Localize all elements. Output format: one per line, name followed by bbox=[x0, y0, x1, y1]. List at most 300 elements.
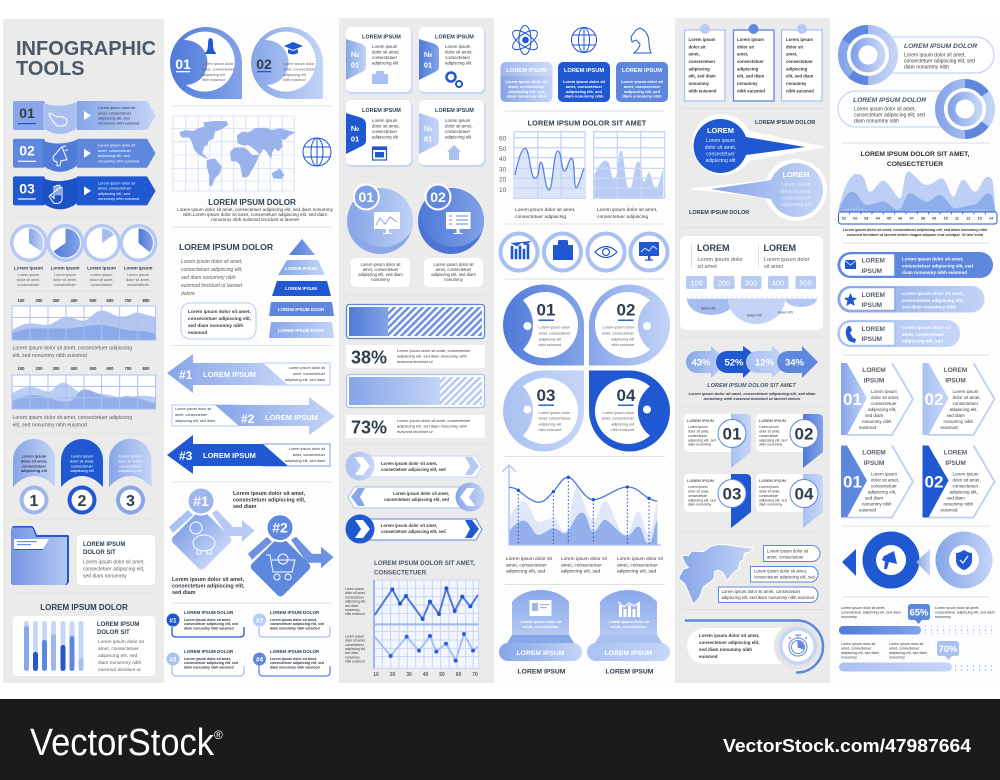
chevron card C: adipiscing elit, bbox=[868, 490, 896, 494]
area chart 1: 200 bbox=[36, 298, 43, 303]
note cards: nibh euismod bbox=[688, 88, 717, 94]
icon: monitor chart bbox=[639, 242, 659, 261]
step arrow 02: amet, consectetuer bbox=[98, 148, 132, 153]
diamond text 1: consectetuer adipiscing elit, bbox=[233, 498, 306, 504]
bracket text: consectetuer adipiscing elit, sed bbox=[184, 622, 238, 626]
note cards: consectetuer bbox=[688, 59, 716, 64]
number card: gears: LOREM IPSUM bbox=[435, 34, 474, 40]
vertical bar chart card: euismod tincidunt ut bbox=[98, 667, 141, 673]
note cards: Lorem ipsum bbox=[786, 37, 813, 42]
icon: gears bbox=[446, 72, 462, 87]
number card: briefcase: dolor sit amet, bbox=[372, 50, 400, 54]
chevron card A: dolor sit amet, bbox=[871, 395, 899, 400]
eurasia africa map bbox=[678, 544, 753, 604]
dial 02: 02 bbox=[617, 300, 635, 320]
step arrow 01: 01 bbox=[19, 105, 35, 121]
speech bubble light: dolor sit amet, bbox=[780, 189, 812, 195]
bubble 2 heading: LOREM IPSUM DOLOR bbox=[689, 210, 749, 216]
chevron card C: LOREM bbox=[862, 450, 886, 456]
note cards: amet, bbox=[688, 52, 700, 57]
target pill 1: Lorem ipsum dolor sit amet, bbox=[904, 52, 966, 58]
diamond step #2 bbox=[248, 514, 334, 598]
area chart 2: 400 bbox=[70, 366, 78, 371]
outlined text box bbox=[181, 303, 256, 339]
bookmark card 02: adipiscing elit, sed bbox=[759, 438, 787, 442]
note cards: adipiscing bbox=[688, 66, 710, 71]
number card: briefcase: 01 bbox=[351, 60, 359, 70]
scale card: 500 bbox=[799, 278, 812, 288]
stopwatch timer block: Lorem ipsum dolor sit amet, bbox=[699, 633, 759, 638]
arrow #2: LOREM IPSUM bbox=[265, 413, 318, 422]
chevron card A bbox=[841, 363, 913, 435]
chevron card B: euismod bbox=[940, 425, 958, 430]
area chart 2: 300 bbox=[52, 366, 60, 371]
dial 01: nibh euismod bbox=[538, 343, 561, 347]
panel: column 5 bbox=[675, 18, 830, 683]
circle text cards bbox=[351, 258, 483, 287]
chart captions: Lorem ipsum dolor sit amet, bbox=[597, 207, 657, 213]
info card 2: Lorem ipsum dolor sit bbox=[563, 79, 606, 84]
number card: gears: Lorem ipsum bbox=[445, 44, 471, 49]
step arrow 03: nonummy nibh euismod bbox=[98, 196, 139, 201]
numbered arches: 3 bbox=[126, 493, 135, 510]
contact pill: phone: adipiscing elit, sed bbox=[902, 338, 943, 344]
map label boxes: Lorem ipsum dolor sit bbox=[767, 548, 809, 554]
info card 2 bbox=[558, 62, 610, 102]
info card 2: diam nonummy nibh bbox=[564, 94, 604, 98]
chevron card B: LOREM bbox=[944, 367, 967, 374]
map text: Lorem ipsum dolor sit amet, consectetuer adipiscing elit, sed diam nonummy bbox=[177, 207, 334, 212]
image id: VectorStock.com/47987664 bbox=[723, 736, 971, 756]
progress 70: 70% bbox=[938, 644, 958, 655]
bookmark card 02 bbox=[756, 414, 823, 468]
bracket badges bbox=[166, 614, 266, 666]
line chart side text: dolor sit amet, bbox=[345, 591, 366, 595]
stat card 73%: 73% bbox=[351, 418, 387, 438]
numbered arches: consectetuer bbox=[71, 464, 94, 468]
outlined text box: Lorem ipsum dolor sit amet, bbox=[188, 309, 251, 314]
wave chart number strip: 14 bbox=[989, 216, 994, 220]
footer watermark band bbox=[0, 699, 1000, 780]
area chart 1: 800 bbox=[142, 298, 150, 303]
icon: shopping cart bbox=[266, 554, 295, 580]
line chart side text: nonummy bbox=[345, 608, 360, 612]
area chart 2: 700 bbox=[124, 366, 132, 371]
donut with shield bbox=[916, 532, 992, 588]
arrow #1: adipiscing elit, sed diam bbox=[285, 378, 325, 382]
folder text card: consectetuer adipiscing elit, bbox=[83, 566, 144, 572]
note cards: dolor sit bbox=[786, 44, 804, 49]
percent text: Lorem ipsum dolor sit amet, consectetuer adipiscing elit, sed diam bbox=[689, 391, 816, 396]
chevron card B: sed diam bbox=[946, 413, 965, 418]
wave chart number strip: 04 bbox=[876, 216, 881, 220]
arrow #3 bbox=[167, 435, 330, 474]
step arrow 02: adipiscing elit, sed bbox=[98, 153, 130, 158]
dial 03: adipiscing elit bbox=[538, 422, 562, 426]
pie charts row: Lorem ipsum bbox=[14, 266, 43, 270]
wave chart number strip bbox=[838, 212, 997, 224]
dial 03: 03 bbox=[537, 386, 555, 405]
dial 03: amet, consectetuer bbox=[538, 416, 572, 420]
icon: briefcase bbox=[372, 71, 388, 84]
dial 01: Lorem ipsum dolor bbox=[538, 326, 571, 330]
numbered arches: consectetuer bbox=[119, 464, 142, 468]
teardrop 02 bbox=[251, 27, 323, 99]
bracket badges: #3 bbox=[169, 656, 177, 664]
stopwatch timer block: consectetuer adipiscing elit, bbox=[699, 640, 760, 645]
step arrow 02: 02 bbox=[19, 143, 35, 159]
pie charts row: Lorem ipsum bbox=[127, 273, 149, 277]
chart 1 caption: Lorem ipsum dolor sit amet, consectetuer adipiscing bbox=[12, 346, 132, 352]
chevron card A: sed diam bbox=[865, 413, 884, 418]
bell card 2 bbox=[587, 590, 670, 661]
arrow #3: amet, consectetuer bbox=[293, 453, 326, 457]
chevron card D: euismod bbox=[940, 508, 958, 512]
chart 2 caption: elit, sed nonummy nibh euismod bbox=[12, 422, 87, 428]
map label boxes: adipiscing elit, sed diam nonummy nibh euismod bbox=[722, 595, 815, 600]
bookmark card 03: Lorem ipsum bbox=[688, 485, 708, 489]
area line charts bbox=[514, 132, 665, 198]
step arrow 03: adipiscing elit, sed bbox=[98, 191, 130, 196]
progress 70: nonummy bbox=[841, 656, 857, 660]
contact pill: mail bbox=[838, 252, 993, 278]
chevron card C: euismod bbox=[859, 508, 877, 512]
chevron card B: consectetuer bbox=[952, 401, 979, 406]
chevron card D bbox=[922, 446, 994, 518]
chart 1 caption: elit, sed nonummy nibh euismod bbox=[12, 353, 87, 359]
percent arrows: 43% bbox=[691, 358, 711, 368]
numbered arches: Lorem ipsum bbox=[71, 454, 93, 458]
folder text card: sed diam nonummy bbox=[83, 574, 127, 580]
line chart axis labels: 60 bbox=[456, 672, 461, 678]
step arrow 03: Lorem ipsum dolor sit bbox=[98, 180, 136, 185]
bracket badges: #2 bbox=[256, 618, 263, 624]
number card: gears: 01 bbox=[424, 60, 432, 70]
diamond step #1 bbox=[169, 488, 254, 571]
icon rings bbox=[500, 234, 668, 270]
teardrop 01: 01 bbox=[175, 56, 191, 72]
chevron card C: dolor sit amet, bbox=[871, 478, 899, 482]
circle text cards: nonummy bbox=[444, 277, 464, 282]
step arrow 02 bbox=[13, 139, 156, 172]
info card 1: diam nonummy nibh bbox=[507, 94, 547, 98]
number card: house: adipiscing elit bbox=[445, 134, 472, 140]
wave chart number strip: 06 bbox=[898, 216, 902, 220]
progress 70: amet, consectetuer bbox=[841, 646, 872, 650]
contact pill: star: sed diam nonummy nibh bbox=[902, 304, 956, 310]
note cards: nonummy bbox=[786, 81, 807, 86]
bookmark card 01: Lorem ipsum bbox=[688, 425, 708, 429]
diamond text 1: Lorem ipsum dolor sit amet, bbox=[233, 491, 306, 497]
arrow #1: #1 bbox=[179, 368, 193, 382]
scale card: 300 bbox=[745, 278, 757, 288]
speech bubble dark: dolor sit amet, bbox=[705, 145, 736, 151]
chevron card D: consectetuer bbox=[952, 484, 979, 488]
vertical bar chart card: DOLOR SIT bbox=[97, 630, 130, 636]
teardrop 01: Lorem ipsum dolor bbox=[202, 62, 234, 66]
contact pill: star: Lorem ipsum dolor sit amet, bbox=[902, 291, 964, 296]
contact pill: phone: Lorem ipsum dolor sit bbox=[902, 325, 951, 330]
step arrow 01 bbox=[13, 101, 156, 134]
folder bbox=[11, 526, 69, 585]
number card: calendar: dolor sit amet, bbox=[372, 124, 400, 128]
step arrow 03 bbox=[13, 176, 156, 209]
scale card: lorem #2 bbox=[747, 314, 762, 318]
heading: LOREM IPSUM DOLOR bbox=[40, 603, 128, 612]
numbered arches: dolor sit amet, bbox=[70, 458, 94, 464]
contact pill: star bbox=[838, 286, 984, 312]
progress 65 bbox=[839, 604, 995, 634]
bell card 1 bbox=[499, 590, 582, 661]
note cards: Lorem ipsum bbox=[737, 37, 764, 42]
arrow #1 bbox=[167, 354, 330, 393]
dial 04: Lorem ipsum dolor bbox=[603, 411, 635, 415]
chevron card B: dolor sit amet, bbox=[952, 395, 981, 400]
bookmark card 03: LOREM IPSUM bbox=[687, 479, 715, 483]
diamond step #1: #1 bbox=[193, 493, 209, 509]
chevron card A: IPSUM bbox=[864, 378, 884, 384]
italic text: euismod tincidunt ut laoreet bbox=[181, 283, 243, 289]
number card: house bbox=[419, 100, 486, 167]
line chart side text: nibh euismod bbox=[345, 660, 365, 664]
numbered arches: Lorem ipsum bbox=[119, 454, 141, 458]
circle text cards: adipiscing elit, sed diam bbox=[431, 272, 476, 277]
icon: megaphone bbox=[53, 146, 68, 166]
pie charts row: consectetuer bbox=[127, 283, 150, 287]
speech bubble light: LOREM bbox=[782, 170, 810, 179]
bookmark card 01: dolor sit amet, bbox=[688, 430, 709, 434]
number card: briefcase: LOREM IPSUM bbox=[362, 34, 401, 40]
bookmark card 03: adipiscing elit, sed bbox=[688, 498, 716, 502]
icon: graduation cap bbox=[284, 42, 303, 54]
bell card 1: Lorem ipsum dolor sit bbox=[521, 619, 562, 624]
chevron card C: 01 bbox=[843, 472, 862, 492]
info card 2: LOREM IPSUM bbox=[564, 68, 604, 74]
progress 70: Lorem ipsum dolor sit bbox=[841, 642, 875, 646]
stat card 73%: euismod tincidunt ut bbox=[397, 429, 433, 434]
numbered arches: Lorem ipsum bbox=[22, 454, 47, 458]
bracket badges: #1 bbox=[169, 618, 177, 624]
note cards: elit, sed diam bbox=[786, 74, 813, 79]
dial 01: 01 bbox=[537, 300, 555, 320]
progress 70: Lorem ipsum dolor sit bbox=[889, 642, 923, 646]
scale card: Lorem ipsum dolor bbox=[764, 257, 810, 263]
y axis labels: 40 bbox=[499, 156, 507, 163]
bookmark card 03 bbox=[684, 474, 751, 528]
step arrow 01: amet, consectetuer bbox=[98, 110, 132, 115]
bell card 1: LOREM IPSUM bbox=[517, 650, 565, 657]
pie charts row: Lorem ipsum bbox=[124, 266, 152, 270]
circle 02 with checklist: 02 bbox=[430, 189, 446, 205]
contact pill: star: consectetuer adipiscing elit, bbox=[902, 298, 964, 303]
contact pill: star: IPSUM bbox=[862, 302, 882, 309]
wave chart number strip: 02 bbox=[853, 216, 857, 220]
line chart side text: consectetuer bbox=[345, 643, 365, 647]
contact pill: mail: diam nonummy nibh euismod bbox=[902, 270, 967, 275]
number card: house: Lorem ipsum bbox=[445, 118, 471, 123]
info card 1: amet, consectetuer bbox=[508, 84, 545, 89]
vertical bar chart card: Lorem ipsum dolor sit bbox=[98, 639, 145, 645]
bracket text: Lorem ipsum dolor sit amet, bbox=[270, 657, 317, 661]
icon: house bbox=[447, 145, 461, 160]
note cards: adipiscing bbox=[786, 66, 808, 71]
teardrop 01: adipiscing elit bbox=[202, 73, 226, 77]
note cards: elit, sed diam bbox=[688, 74, 716, 79]
chevron card A: LOREM bbox=[862, 367, 886, 374]
note cards: consectetuer bbox=[737, 59, 764, 64]
percent heading: LOREM IPSUM DOLOR SIT AMET bbox=[707, 383, 796, 389]
pie charts row: consectetuer bbox=[54, 283, 77, 287]
diamond step #2: #2 bbox=[272, 520, 288, 536]
chevron card D: nonummy nibh bbox=[944, 502, 974, 506]
number card: house: 01 bbox=[424, 134, 432, 144]
note cards: amet, bbox=[737, 52, 748, 57]
dial 01 bbox=[503, 284, 584, 366]
stopwatch timer block: euismod bbox=[699, 654, 718, 659]
target pill 1: consectetuer adipiscing elit, sed bbox=[904, 58, 975, 64]
outlined text box: euismod bbox=[188, 330, 207, 335]
bracket text: consectetuer adipiscing elit, sed bbox=[270, 622, 324, 626]
bookmark card 03: diam nonummy bbox=[688, 502, 711, 506]
chevron card B: adipiscing elit, bbox=[950, 407, 978, 412]
area chart captions: adipiscing elit, sed bbox=[561, 568, 601, 574]
vertical bar chart card bbox=[13, 616, 155, 676]
number card: house: dolor sit amet, bbox=[445, 124, 473, 128]
icon: piggy bank bbox=[190, 522, 215, 554]
contact pill: phone: IPSUM bbox=[862, 336, 882, 343]
italic text: Lorem ipsum dolor sit amet, bbox=[181, 259, 243, 265]
dial 02: Lorem ipsum dolor bbox=[603, 326, 635, 330]
teardrop 02: nibh euismod bbox=[283, 78, 306, 82]
teardrop 01: nibh euismod bbox=[202, 78, 225, 82]
chart 2 caption: Lorem ipsum dolor sit amet, consectetuer adipiscing bbox=[12, 415, 132, 421]
chevron card B: Lorem ipsum bbox=[952, 389, 979, 394]
bookmark card 04 bbox=[756, 474, 823, 528]
number card: house: consectetuer bbox=[445, 129, 471, 134]
progress 65: Lorem ipsum dolor sit amet, bbox=[841, 606, 885, 610]
chevron card D: 02 bbox=[924, 472, 943, 492]
arrow #2 bbox=[172, 397, 335, 435]
bracket text: diam nonummy nibh euismod bbox=[184, 666, 234, 670]
wave chart number strip: 05 bbox=[887, 216, 891, 220]
pyramid bbox=[269, 239, 334, 338]
icon: bar chart bbox=[511, 241, 531, 259]
area chart captions: amet, consectetuer bbox=[561, 562, 602, 568]
dial 01: adipiscing elit bbox=[538, 338, 562, 342]
circle text cards: Lorem ipsum dolor sit bbox=[360, 262, 401, 267]
info card 3: LOREM IPSUM bbox=[622, 68, 662, 74]
bell card 2 label: LOREM IPSUM bbox=[606, 668, 654, 676]
area chart 2: 600 bbox=[106, 366, 114, 371]
teardrop 02: Lorem ipsum dolor bbox=[283, 62, 315, 66]
wave chart caption: Lorem ipsum dolor sit amet, consectetuer adipiscing elit, sed diam nonummy nibh bbox=[843, 228, 988, 232]
line chart side text: sed diam bbox=[345, 604, 359, 608]
icon: chess knight bbox=[631, 28, 651, 53]
number card: calendar: consectetuer bbox=[372, 129, 398, 134]
arrow #2: Lorem ipsum dolor sit bbox=[175, 407, 212, 411]
title: INFOGRAPHIC bbox=[16, 38, 156, 60]
scale card: lorem #3 bbox=[778, 310, 793, 314]
speech bubble dark: Lorem ipsum bbox=[706, 138, 735, 144]
scale card: 100 bbox=[690, 278, 703, 288]
area chart 1: 700 bbox=[124, 298, 132, 303]
numbered arches: 2 bbox=[78, 493, 87, 510]
icon: id card bbox=[530, 600, 552, 616]
number card: house: № bbox=[424, 124, 432, 133]
wave chart number strip: 11 bbox=[955, 216, 959, 220]
icon: bell bbox=[205, 38, 216, 54]
chevron card B: nonummy nibh bbox=[944, 419, 974, 424]
pie charts row: dolor sit amet, bbox=[17, 278, 40, 282]
map text: nonummy nibh euismod tincidunt ut laoreet bbox=[211, 217, 300, 222]
chevron card A: adipiscing elit, bbox=[868, 407, 896, 412]
title: TOOLS bbox=[16, 58, 85, 80]
pie charts row: dolor sit amet, bbox=[90, 278, 113, 282]
line chart axis labels: 20 bbox=[390, 672, 395, 678]
line chart axis labels: 40 bbox=[423, 672, 428, 678]
bell card 1: amet, consectetuer bbox=[523, 624, 559, 629]
folder text card: DOLOR SIT bbox=[83, 550, 116, 556]
progress 65: 65% bbox=[909, 608, 929, 618]
arrow #2: #2 bbox=[241, 412, 255, 426]
map label boxes bbox=[718, 546, 820, 602]
arrow #3: #3 bbox=[179, 449, 193, 463]
bookmark card 04: diam nonummy bbox=[759, 502, 782, 506]
progress 65: consectetuer adipiscing elit, sed diam bbox=[935, 610, 995, 614]
progress 65: nonummy bbox=[935, 615, 951, 619]
logo wordmark: VectorStock bbox=[30, 722, 215, 764]
area chart 1 bbox=[12, 298, 156, 340]
y axis labels: 20 bbox=[499, 176, 507, 184]
diamond text 2: consectetuer adipiscing elit, bbox=[172, 584, 245, 590]
stat card 38%: adipiscing elit, sed diam nonummy nibh bbox=[397, 354, 468, 358]
y axis labels: 30 bbox=[499, 166, 507, 174]
y axis labels: 10 bbox=[499, 187, 507, 194]
dial 02: amet, consectetuer bbox=[602, 332, 635, 336]
panel: column 3 bbox=[339, 18, 494, 683]
area chart 1: 500 bbox=[90, 298, 97, 303]
speech bubble dark: LOREM bbox=[707, 126, 734, 135]
target pill 1 bbox=[838, 25, 994, 85]
step arrow 01: nonummy nibh euismod bbox=[98, 121, 139, 126]
number card: house: LOREM IPSUM bbox=[435, 108, 474, 114]
bracket text: LOREM IPSUM DOLOR bbox=[270, 610, 320, 615]
circle text cards: Lorem ipsum dolor sit bbox=[433, 262, 474, 267]
arrow #1: LOREM IPSUM bbox=[203, 370, 256, 379]
percent arrows: 12% bbox=[755, 358, 775, 368]
bookmark card 02: Lorem ipsum bbox=[759, 425, 779, 429]
scale card: sit amet bbox=[764, 264, 784, 270]
vertical bar chart card: amet, consectetuer bbox=[98, 646, 139, 652]
progress 70: adipiscing elit, sed diam bbox=[841, 651, 879, 655]
dial 04 bbox=[589, 370, 670, 452]
diamond text 2: Lorem ipsum dolor sit amet, bbox=[172, 577, 245, 583]
target pill 2: Lorem ipsum dolor sit amet, bbox=[854, 106, 916, 112]
teardrop 02: adipiscing elit bbox=[283, 73, 307, 77]
chevron card D: Lorem ipsum bbox=[952, 472, 979, 476]
bracket text: Lorem ipsum dolor sit amet, bbox=[184, 657, 231, 661]
numbered arches: 1 bbox=[30, 493, 39, 510]
step arrow 02: Lorem ipsum dolor sit bbox=[98, 143, 136, 148]
circle 01 with monitor bbox=[347, 181, 416, 254]
teardrop 01 bbox=[170, 27, 242, 99]
info card 1 bbox=[500, 62, 552, 102]
dial 02 bbox=[589, 284, 670, 366]
arrow #2: amet, consectetuer bbox=[175, 413, 208, 417]
line chart axis labels: 50 bbox=[439, 672, 445, 678]
area chart captions: Lorem ipsum dolor sit bbox=[617, 556, 664, 562]
contact pill: mail: Lorem ipsum dolor sit amet, bbox=[902, 256, 964, 262]
